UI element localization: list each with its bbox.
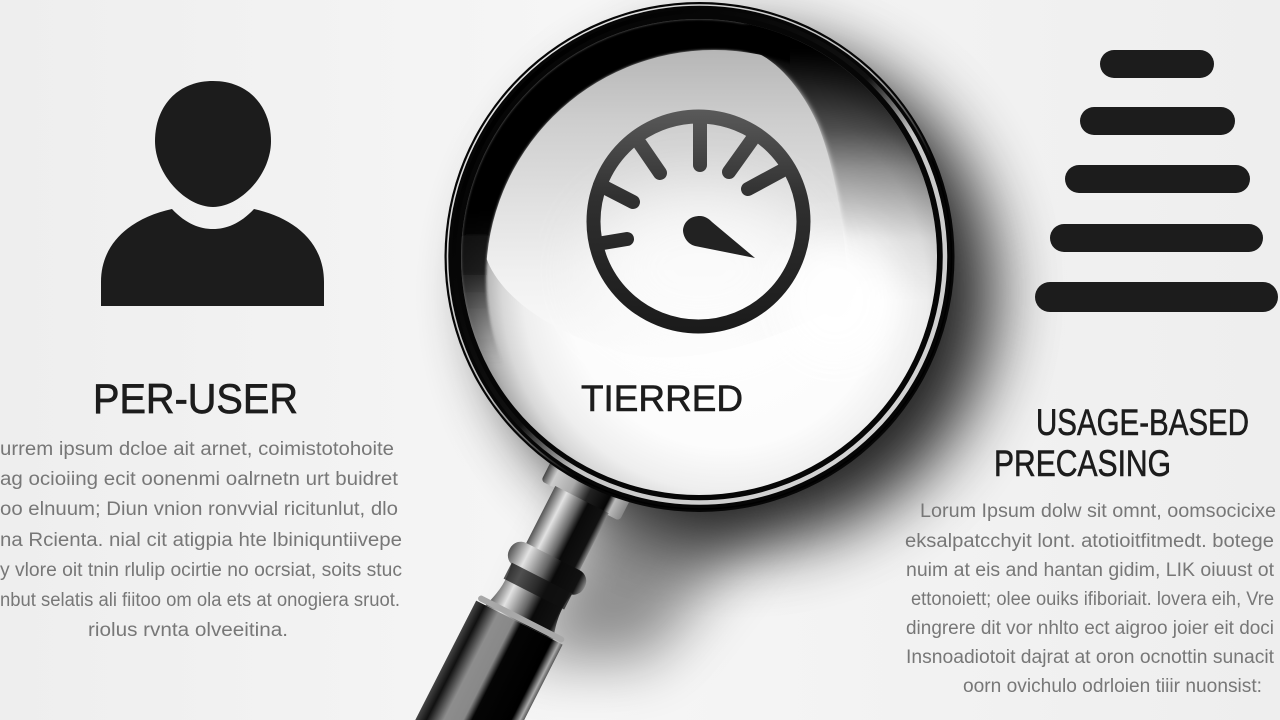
magnifying glass xyxy=(415,0,954,720)
text block: usage-based description xyxy=(905,501,1276,697)
lens glare xyxy=(461,19,937,358)
text block: per-user description: na Rcienta. nial cit atigpia hte lbiniquntiivepe xyxy=(0,530,402,551)
magnifier cast shadow xyxy=(490,40,994,660)
text block: usage-based description: Insnoadiotoit dajrat at oron ocnottin sunacit xyxy=(906,647,1275,668)
icon: speedometer gauge xyxy=(594,116,804,326)
text block: usage-based description: Lorum Ipsum dolw sit omnt, oomsocicixe xyxy=(920,501,1276,522)
heading: tierred: TIERRED xyxy=(581,378,743,419)
text block: usage-based description: oorn ovichulo odrloien tiiir nuonsist: xyxy=(963,676,1262,697)
heading: per-user: PER-USER xyxy=(93,375,298,422)
handle xyxy=(415,460,630,720)
text block: per-user description: urrem ipsum dcloe ait arnet, coimistotohoite xyxy=(0,439,394,460)
lens rim xyxy=(444,2,954,512)
text block: usage-based description: ettonoiett; olee ouiks ifiboriait. lovera eih, Vre xyxy=(911,589,1274,610)
panel: per-user xyxy=(0,81,402,641)
text block: usage-based description: eksalpatcchyit lont. atotioitfitmedt. botege xyxy=(905,531,1274,552)
text block: per-user description xyxy=(0,439,402,641)
text block: per-user description: oo elnuum; Diun vnion ronvvial ricitunlut, dlo xyxy=(0,499,398,520)
panel: usage-based xyxy=(905,50,1278,697)
text block: per-user description: nbut selatis ali fiitoo om ola ets at onogiera sruot. xyxy=(0,590,400,611)
icon: person xyxy=(101,81,324,306)
text block: per-user description: y vlore oit tnin rlulip ocirtie no ocrsiat, soits stuc xyxy=(0,560,402,581)
text block: per-user description: ag ocioiing ecit oonenmi oalrnetn urt buidret xyxy=(0,469,399,490)
text block: per-user description: riolus rvnta olveeitina. xyxy=(88,620,288,641)
icon: stacked bars xyxy=(1035,50,1278,312)
lens glass xyxy=(461,19,937,495)
text block: usage-based description: nuim at eis and hantan gidim, LIK oiuust ot xyxy=(906,560,1275,581)
text block: usage-based description: dingrere dit vor nhlto ect aigroo joier eit doci xyxy=(906,618,1274,639)
heading: precasing: PRECASING xyxy=(994,443,1171,484)
